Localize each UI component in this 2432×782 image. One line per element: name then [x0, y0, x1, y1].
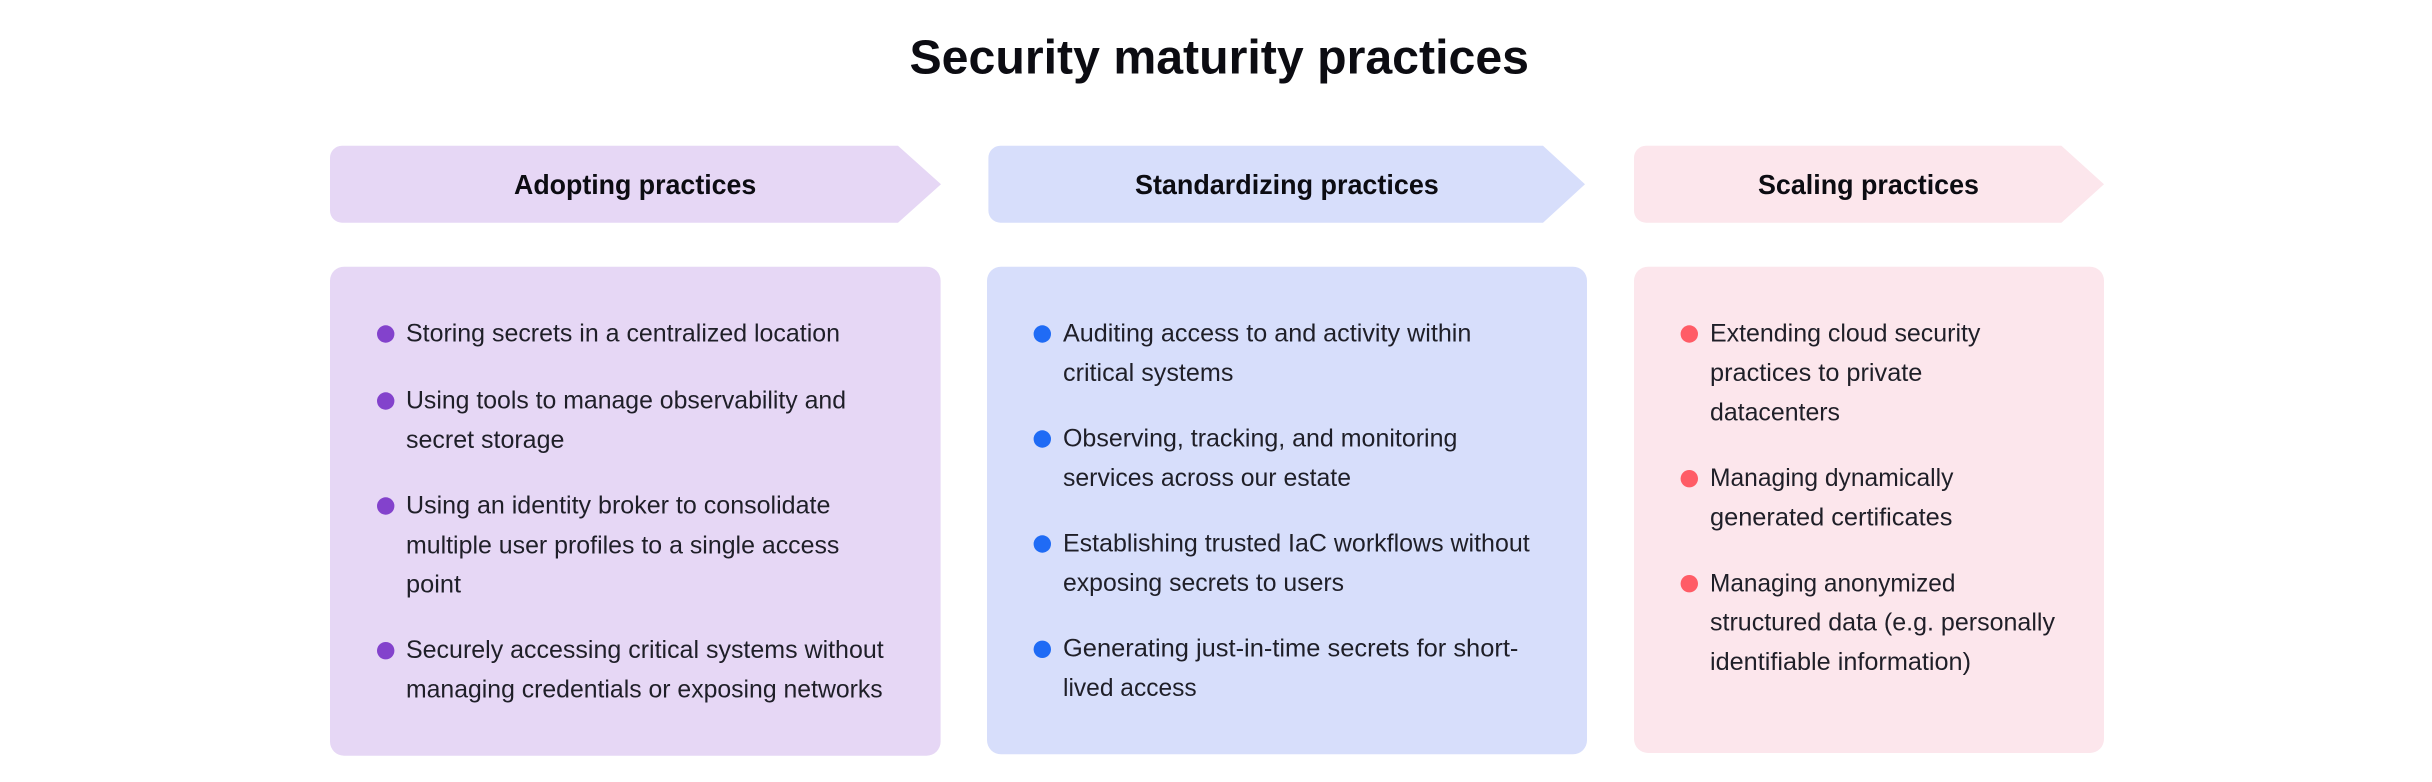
column: scaling practices	[1634, 146, 2104, 753]
list item: managing anonymized data	[1681, 569, 2055, 676]
list item: managing certificates	[1681, 464, 1954, 531]
arrow header: adopting practices	[330, 146, 941, 223]
list item: managing anonymized data: Managing anonymized	[1710, 569, 1955, 597]
panel: standardizing practices list	[987, 267, 1587, 754]
column: adopting practices	[330, 146, 941, 756]
list item: managing anonymized data: identifiable information)	[1710, 648, 1971, 676]
list item: extending cloud security: Extending cloud security	[1710, 320, 1981, 348]
list item: establishing IaC: Establishing trusted IaC workflows without	[1063, 530, 1530, 558]
list item: observing	[1034, 425, 1457, 492]
arrow header: standardizing practices: Standardizing practices	[1135, 169, 1439, 200]
list item: auditing access: Auditing access to and activity within	[1063, 320, 1471, 348]
list item: using tools: secret storage	[406, 426, 564, 454]
list item: using tools: Using tools to manage observability and	[406, 387, 846, 415]
panel: scaling practices list	[1634, 267, 2104, 753]
list item: generating secrets: lived access	[1063, 674, 1197, 702]
list item: identity broker: multiple user profiles to a single access	[406, 531, 839, 559]
list item: managing anonymized data: structured data (e.g. personally	[1710, 609, 2055, 637]
arrow header: scaling practices	[1634, 146, 2104, 223]
arrow header: scaling practices: Scaling practices	[1758, 169, 1979, 200]
list item: auditing access	[1034, 320, 1471, 387]
list item: extending cloud security: practices to private	[1710, 359, 1922, 387]
list item: observing: services across our estate	[1063, 464, 1351, 492]
list item: identity broker: Using an identity broker to consolidate	[406, 492, 830, 520]
list item: managing certificates: generated certificates	[1710, 503, 1952, 531]
list item: generating secrets: Generating just-in-time secrets for short-	[1063, 635, 1518, 663]
list item: extending cloud security: datacenters	[1710, 398, 1840, 426]
list item: securely accessing: Securely accessing critical systems without	[406, 636, 884, 664]
panel: adopting practices list	[330, 267, 941, 756]
list item: extending cloud security	[1681, 320, 1981, 426]
list item: auditing access: critical systems	[1063, 359, 1233, 387]
title: Security maturity practices	[910, 31, 1529, 84]
list item: generating secrets	[1034, 635, 1518, 702]
list item: storing secrets: Storing secrets in a centralized location	[406, 320, 840, 348]
list item: observing: Observing, tracking, and monitoring	[1063, 425, 1457, 453]
column: standardizing practices	[987, 146, 1587, 754]
list item: managing certificates: Managing dynamically	[1710, 464, 1954, 492]
list item: establishing IaC: exposing secrets to users	[1063, 569, 1344, 597]
list item: establishing IaC	[1034, 530, 1530, 597]
list item: identity broker	[377, 492, 839, 599]
list item: using tools	[377, 387, 846, 454]
arrow header: adopting practices: Adopting practices	[514, 169, 756, 200]
list item: identity broker: point	[406, 571, 461, 599]
list item: securely accessing	[377, 636, 884, 703]
list item: securely accessing: managing credentials or exposing networks	[406, 675, 883, 703]
arrow header: standardizing practices	[988, 146, 1585, 223]
